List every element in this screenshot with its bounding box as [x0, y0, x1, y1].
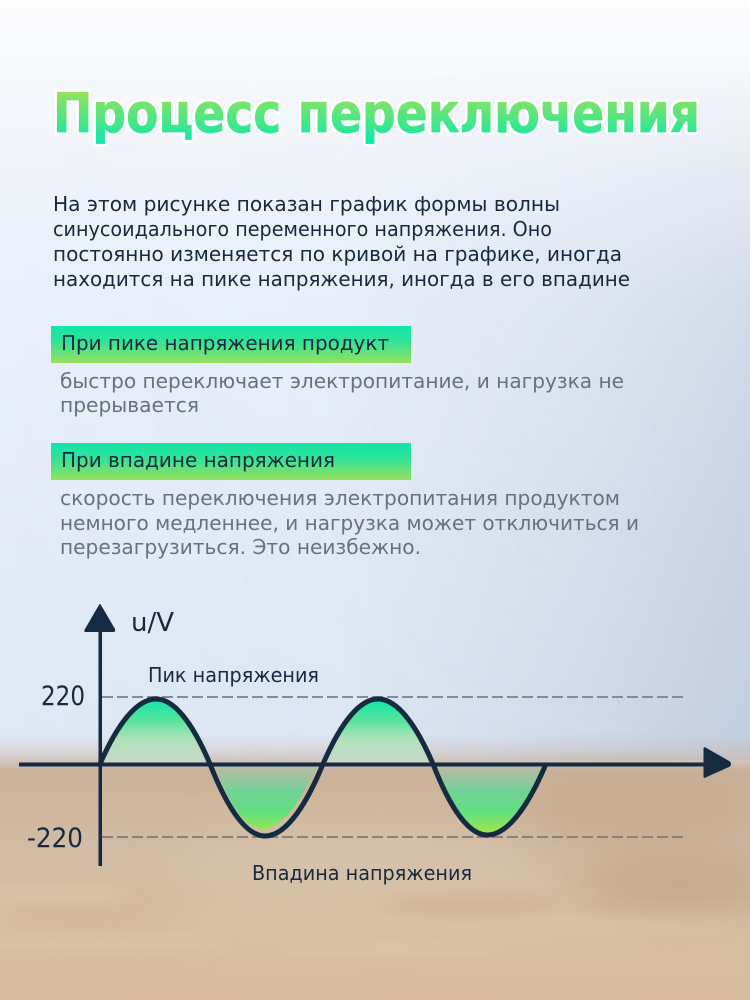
label: voltage peak: Пик напряжения [148, 663, 319, 687]
heading bar: peak [51, 326, 411, 363]
intro text block: На этом рисунке показан график формы волны [53, 192, 560, 216]
panel: voltage trough [51, 443, 639, 559]
description: trough: немного медленнее, и нагрузка может отключиться и [60, 511, 639, 535]
description: trough: скорость переключения электропитания продуктом [60, 486, 620, 510]
description: peak: прерывается [60, 393, 199, 417]
intro text block: находится на пике напряжения, иногда в его впадине [53, 267, 630, 291]
description: peak [60, 369, 624, 417]
x axis with arrow [19, 747, 731, 778]
dashed line: -220 level [102, 836, 686, 838]
heading bar: trough [51, 443, 411, 480]
intro text block [53, 192, 630, 291]
intro text block: синусоидального переменного напряжения. Оно [53, 217, 552, 241]
description: trough: перезагрузиться. Это неизбежно. [60, 535, 421, 559]
heading bar: trough: При впадине напряжения [61, 448, 335, 472]
sine wave curve [100, 699, 546, 836]
chart: sinusoidal voltage waveform [19, 604, 731, 885]
wave gradient fills [100, 699, 546, 835]
axis label: u/V: u/V [131, 608, 174, 638]
dashed line: +220 level [102, 696, 686, 698]
label: voltage trough: Впадина напряжения [252, 861, 472, 885]
description: peak: быстро переключает электропитание, и нагрузка не [60, 369, 624, 393]
tick label: -220: -220 [27, 823, 83, 854]
heading bar: peak: При пике напряжения продукт [61, 331, 389, 355]
description: trough [60, 486, 639, 559]
y axis with arrow [84, 604, 115, 866]
intro text block: постоянно изменяется по кривой на графике, иногда [53, 242, 622, 266]
panel: voltage peak [51, 326, 624, 417]
tick label: 220: 220 [41, 681, 85, 712]
